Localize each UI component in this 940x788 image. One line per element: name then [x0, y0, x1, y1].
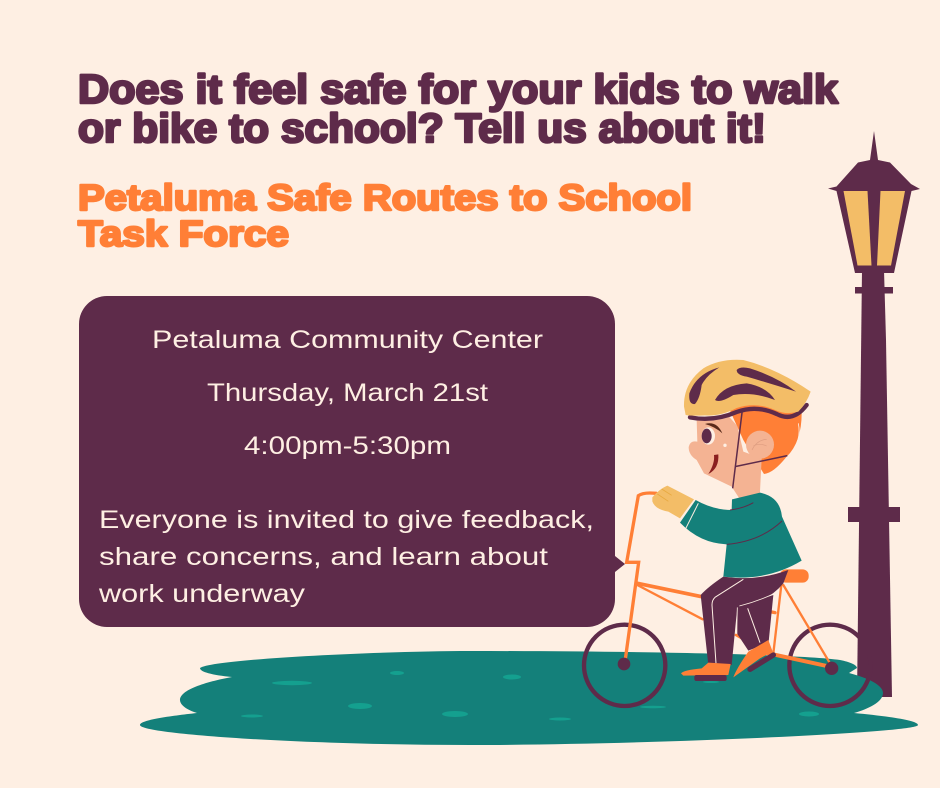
panel: event details: Petaluma Community Center — [152, 326, 543, 354]
panel: event details: Everyone is invited to give feedback, — [99, 506, 594, 534]
title — [78, 66, 838, 151]
icon: child riding a bicycle — [584, 360, 871, 706]
neck and head — [689, 403, 802, 499]
title: Does it feel safe for your kids to walk — [78, 66, 838, 112]
panel: event details: Thursday, March 21st — [207, 379, 488, 407]
panel: event details: share concerns, and learn about — [99, 543, 548, 571]
subtitle: Task Force — [78, 213, 289, 254]
helmet straps — [733, 410, 787, 488]
helmet — [684, 360, 811, 419]
panel: event details — [79, 296, 625, 627]
panel: event details: 4:00pm-5:30pm — [244, 432, 451, 460]
panel: event details: work underway — [98, 580, 306, 608]
shirt — [680, 493, 802, 578]
bicycle — [584, 493, 871, 706]
near leg and shoe — [681, 570, 788, 681]
ground — [140, 651, 918, 745]
title: or bike to school? Tell us about it! — [78, 105, 766, 151]
far leg and shoe — [733, 595, 773, 677]
glove — [652, 486, 694, 518]
subtitle: Petaluma Safe Routes to School — [78, 177, 692, 218]
icon: street lamp — [828, 131, 920, 697]
subtitle — [78, 177, 692, 254]
